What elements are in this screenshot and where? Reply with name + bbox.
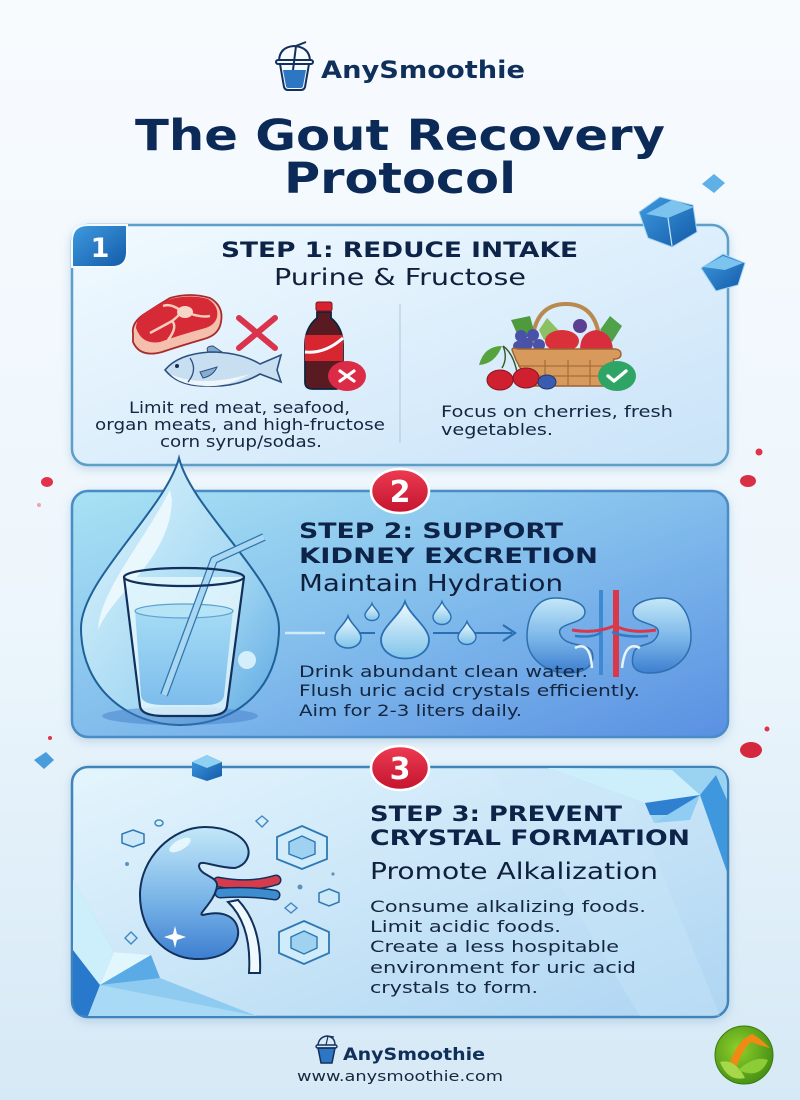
step 2 heading: KIDNEY EXCRETION bbox=[299, 544, 598, 568]
step number badge 2 bbox=[371, 469, 429, 513]
decorative red and blue gems bbox=[34, 448, 770, 769]
flow of drops to kidneys bbox=[285, 602, 515, 658]
icon: smoothie cup bbox=[276, 42, 313, 90]
step 3 body text: Consume alkalizing foods. bbox=[370, 897, 646, 916]
title: Protocol bbox=[284, 154, 516, 204]
step 3 heading: CRYSTAL FORMATION bbox=[370, 826, 690, 850]
step 2 subheading: Maintain Hydration bbox=[299, 571, 563, 597]
footer cup icon bbox=[316, 1036, 337, 1063]
icon: fruit basket bbox=[479, 304, 636, 391]
step 3 body text: crystals to form. bbox=[370, 978, 538, 997]
step 3 body text bbox=[370, 897, 646, 997]
step 3 body text: Limit acidic foods. bbox=[370, 917, 561, 936]
crystal corner bottom left bbox=[73, 880, 257, 1016]
step 2 body text: Flush uric acid crystals efficiently. bbox=[299, 681, 640, 700]
step 2 body text bbox=[299, 662, 640, 720]
icon: kidney with crystals bbox=[122, 816, 339, 973]
icon: soda bottle with red x bbox=[305, 302, 366, 391]
title bbox=[135, 111, 665, 204]
step 2 body text: Aim for 2-3 liters daily. bbox=[299, 701, 522, 720]
limit foods text: Limit red meat, seafood, bbox=[129, 398, 350, 417]
crystal hexagons bbox=[122, 816, 339, 964]
panel: step 2 support kidney excretion bbox=[72, 458, 728, 737]
footer brand bbox=[297, 1036, 503, 1085]
icon: small crystal cube bbox=[192, 755, 222, 781]
logo wordmark: AnySmoothie bbox=[321, 56, 525, 84]
panel: step 3 prevent crystal formation bbox=[72, 746, 728, 1017]
footer website: www.anysmoothie.com bbox=[297, 1069, 503, 1085]
limit foods text: corn syrup/sodas. bbox=[160, 432, 322, 451]
step number badge 1: 1 bbox=[91, 233, 109, 264]
step 2 body text: Drink abundant clean water. bbox=[299, 662, 588, 681]
step 3 heading: STEP 3: PREVENT bbox=[370, 802, 623, 826]
icon: fish bbox=[165, 346, 281, 386]
step 2 heading: STEP 2: SUPPORT bbox=[299, 519, 564, 543]
icon: large blue crystals bbox=[639, 174, 745, 291]
footer wordmark: AnySmoothie bbox=[343, 1045, 485, 1065]
step number badge 1 bbox=[72, 225, 127, 267]
focus foods text: vegetables. bbox=[441, 420, 553, 439]
step 1 heading: STEP 1: REDUCE INTAKE bbox=[221, 238, 578, 262]
icon: steak bbox=[133, 295, 222, 354]
title: The Gout Recovery bbox=[135, 111, 665, 161]
step 3 body text: environment for uric acid bbox=[370, 958, 636, 977]
limit foods text bbox=[95, 398, 385, 451]
step number badge 2: 2 bbox=[390, 475, 410, 510]
step 2 heading bbox=[299, 519, 598, 568]
focus foods text bbox=[441, 402, 673, 439]
red x badge bbox=[328, 361, 366, 391]
limit foods text: organ meats, and high-fructose bbox=[95, 415, 385, 434]
crystal corner top right bbox=[548, 768, 727, 872]
green check badge bbox=[598, 361, 636, 391]
step 3 subheading: Promote Alkalization bbox=[370, 859, 658, 885]
brand logo bbox=[276, 42, 525, 90]
icon: green leaf badge bbox=[715, 1026, 773, 1084]
focus foods text: Focus on cherries, fresh bbox=[441, 402, 673, 421]
icon: water drop with glass bbox=[81, 458, 279, 725]
panel: step 1 reduce intake bbox=[72, 225, 728, 465]
icon: red cross bbox=[239, 318, 275, 348]
step number badge 3 bbox=[371, 746, 429, 790]
step number badge 3: 3 bbox=[390, 752, 410, 787]
icon: pair of kidneys bbox=[527, 590, 691, 677]
step 1 subheading: Purine & Fructose bbox=[274, 265, 526, 291]
step 3 heading bbox=[370, 802, 690, 850]
step 3 body text: Create a less hospitable bbox=[370, 937, 619, 956]
